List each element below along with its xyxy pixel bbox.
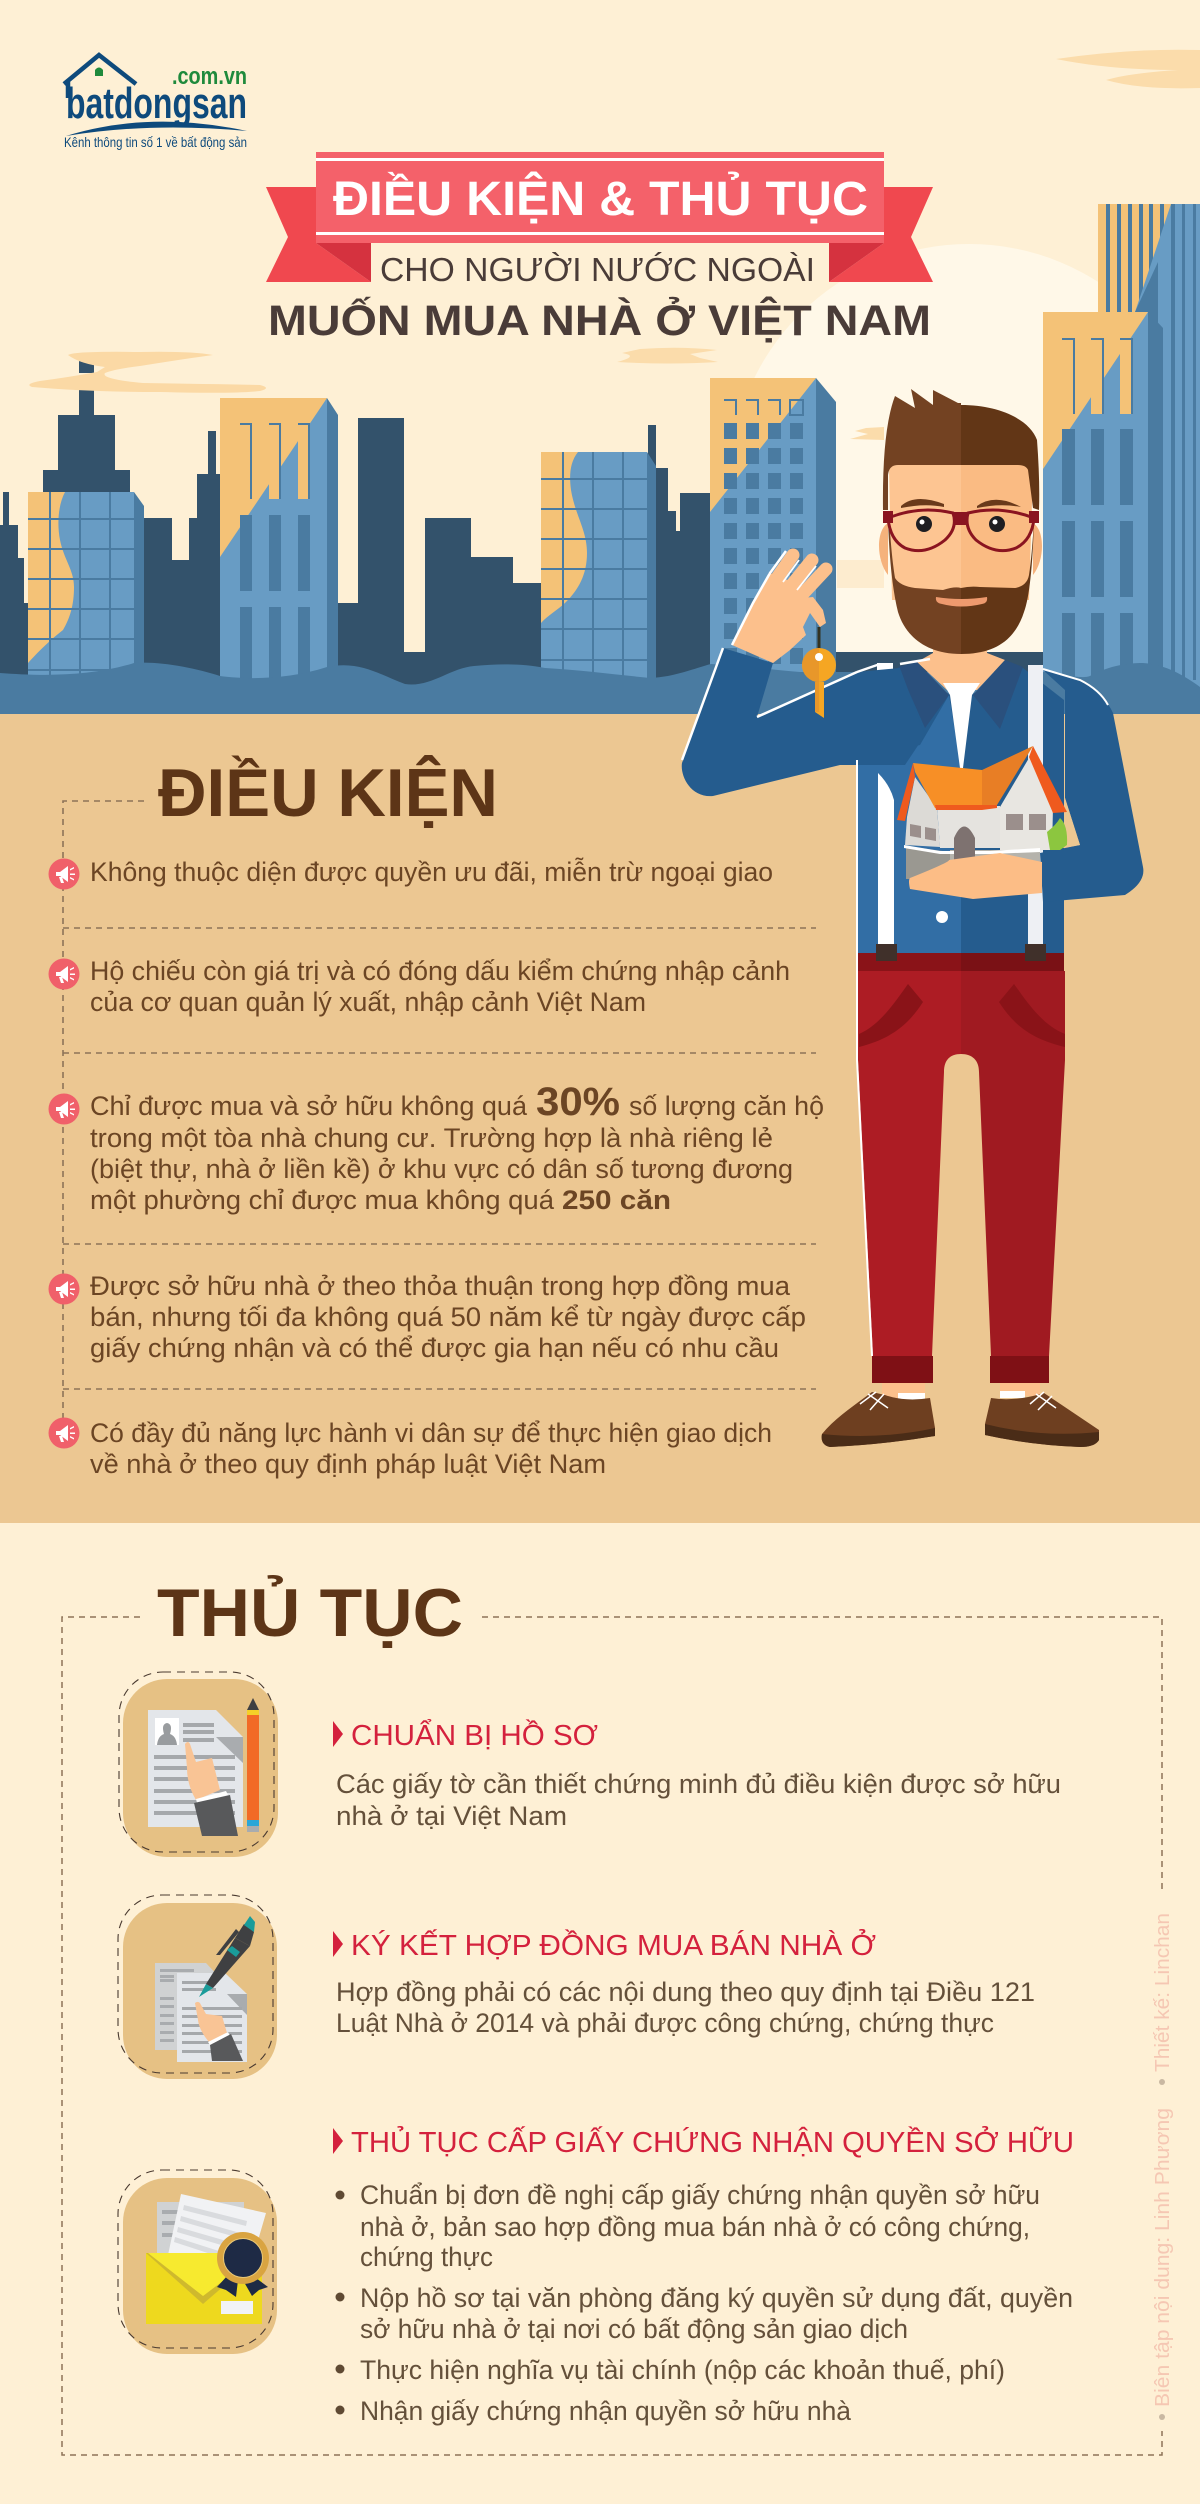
condition 4 text: giấy chứng nhận và có thể được gia hạn nếu có nhu cầu xyxy=(90,1333,779,1363)
step 3 bullet list: sở hữu nhà ở tại nơi có bất động sản giao dịch xyxy=(360,2314,908,2344)
raised hand xyxy=(732,551,826,663)
step 2 text: Luật Nhà ở 2014 và phải được công chứng, chứng thực xyxy=(336,2008,994,2038)
cloud: top right xyxy=(1056,50,1200,88)
step 2 text: Hợp đồng phải có các nội dung theo quy định tại Điều 121 xyxy=(336,1977,1035,2007)
condition 2 text: Hộ chiếu còn giá trị và có đóng dấu kiểm chứng nhập cảnh xyxy=(90,956,790,986)
dark skyline xyxy=(0,361,1043,700)
step 1 text: Các giấy tờ cần thiết chứng minh đủ điều kiện được sở hữu xyxy=(336,1769,1061,1799)
logo tagline: Kênh thông tin số 1 về bất động sản xyxy=(64,134,247,150)
socks xyxy=(898,1391,1025,1400)
step 3 heading: THỦ TỤC CẤP GIẤY CHỨNG NHẬN QUYỀN SỞ HỮU xyxy=(351,2125,1074,2159)
step 3 bullet list: Thực hiện nghĩa vụ tài chính (nộp các khoản thuế, phí) xyxy=(360,2355,1005,2385)
condition 5 text xyxy=(90,1418,772,1479)
belt xyxy=(858,953,961,971)
collar xyxy=(898,660,1023,729)
icon: megaphone 2 xyxy=(48,958,80,990)
building 2 xyxy=(220,398,338,680)
arrow marker 3 xyxy=(333,2128,343,2154)
condition 2 xyxy=(48,956,790,1017)
step 1 text: nhà ở tại Việt Nam xyxy=(336,1801,567,1831)
dashed frame xyxy=(62,1617,1162,2455)
building 4 xyxy=(710,378,836,680)
icon: envelope with seal xyxy=(118,2170,277,2354)
cloud: centre xyxy=(617,348,718,364)
building 3 xyxy=(541,452,656,680)
arrow marker 1 xyxy=(333,1721,343,1747)
jacket torso xyxy=(858,668,1064,953)
title line 1: ĐIỀU KIỆN & THỦ TỤC xyxy=(333,171,868,226)
separators xyxy=(63,928,816,1389)
condition 3 text: 30% xyxy=(536,1080,620,1124)
step 2 text xyxy=(336,1977,1035,2038)
raised arm xyxy=(682,648,925,796)
icon: megaphone 5 xyxy=(48,1418,80,1448)
step 3 bullet list: chứng thực xyxy=(360,2242,493,2272)
section band: điều kiện background xyxy=(0,714,1200,1523)
condition 4 text: Được sở hữu nhà ở theo thỏa thuận trong hợp đồng mua xyxy=(90,1271,791,1301)
eyes xyxy=(916,516,932,532)
condition 3 text: 250 căn xyxy=(562,1185,671,1215)
ground hills xyxy=(0,663,1200,714)
section: điều kiện xyxy=(48,754,824,1479)
ribbon body xyxy=(316,152,884,243)
tan gap beside arm xyxy=(1063,798,1080,848)
face xyxy=(889,465,961,600)
eyebrows xyxy=(901,499,1021,508)
cloud: left smoke over tower xyxy=(29,352,266,393)
condition 2 text xyxy=(90,956,790,1017)
ears xyxy=(879,523,1042,575)
mouth xyxy=(936,597,987,606)
glasses xyxy=(888,510,1034,551)
icon: megaphone 4 xyxy=(48,1274,80,1304)
cloud: pale near hand xyxy=(837,560,884,588)
condition 3 text: (biệt thự, nhà ở liền kề) ở khu vực có dân số tương đương xyxy=(90,1154,793,1184)
step 3 xyxy=(118,2125,1074,2426)
condition 4 text xyxy=(90,1271,806,1363)
step 2 heading: KÝ KẾT HỢP ĐỒNG MUA BÁN NHÀ Ở xyxy=(351,1928,876,1962)
left shoe xyxy=(822,1392,935,1447)
logo domain: .com.vn xyxy=(172,63,247,90)
key xyxy=(802,627,836,718)
suspender clips xyxy=(876,944,1046,961)
condition 5 xyxy=(48,1418,772,1479)
condition 3 text: Chỉ được mua và sở hữu không quá xyxy=(90,1091,528,1121)
condition 3 xyxy=(48,1080,824,1215)
condition 2 text: của cơ quan quản lý xuất, nhập cảnh Việt Nam xyxy=(90,987,646,1017)
title ribbon xyxy=(266,152,933,345)
trousers xyxy=(858,971,961,1356)
step 1 text xyxy=(336,1769,1061,1831)
trouser cuffs xyxy=(872,1356,1049,1383)
ankles xyxy=(882,1383,1040,1398)
neck xyxy=(917,640,1005,690)
step 3 bullet list: Nộp hồ sơ tại văn phòng đăng ký quyền sử dụng đất, quyền xyxy=(360,2283,1073,2313)
condition 3 text: một phường chỉ được mua không quá xyxy=(90,1185,555,1215)
logo swoosh xyxy=(66,122,247,136)
condition 4 text: bán, nhưng tối đa không quá 50 năm kể từ ngày được cấp xyxy=(90,1302,806,1332)
arrow marker 2 xyxy=(333,1931,343,1957)
title line 2: CHO NGƯỜI NƯỚC NGOÀI xyxy=(380,251,815,288)
shirt xyxy=(943,683,980,768)
hair xyxy=(883,389,961,510)
logo window xyxy=(95,68,103,76)
step 3 bullet list: nhà ở, bản sao hợp đồng mua bán nhà ở có công chứng, xyxy=(360,2212,1030,2242)
jacket button xyxy=(936,911,948,923)
plant xyxy=(1047,818,1067,850)
house roof xyxy=(913,763,982,808)
ribbon folds xyxy=(316,243,884,282)
step 1 xyxy=(119,1672,1061,1857)
condition 3 text: số lượng căn hộ xyxy=(629,1091,824,1121)
lower hand xyxy=(909,853,1042,899)
condition 3 text: trong một tòa nhà chung cư. Trường hợp là nhà riêng lẻ xyxy=(90,1123,773,1153)
icon: contract with pen xyxy=(118,1895,277,2079)
icon: megaphone 3 xyxy=(48,1094,80,1124)
credits: Thiết kế: Linchan xyxy=(1152,1913,1174,2072)
condition 1 xyxy=(48,856,773,890)
section: thủ tục xyxy=(62,1574,1174,2455)
pockets xyxy=(859,984,1065,1047)
condition 5 text: về nhà ở theo quy định pháp luật Việt Nam xyxy=(90,1449,606,1479)
heading: THỦ TỤC xyxy=(157,1574,463,1651)
step 2 xyxy=(118,1895,1035,2079)
logo wordmark: batdongsan xyxy=(66,79,247,128)
man holding key and house xyxy=(682,389,1143,1447)
right shoe xyxy=(985,1393,1099,1447)
house door xyxy=(954,826,975,862)
cityscape xyxy=(0,50,1200,714)
title line 3: MUỐN MUA NHÀ Ở VIỆT NAM xyxy=(268,296,931,345)
credits: Biên tập nội dung: Linh Phương xyxy=(1152,2108,1174,2407)
building 6 xyxy=(1098,204,1200,700)
logo xyxy=(64,55,247,150)
cloud: near head xyxy=(850,427,884,440)
right arm xyxy=(1040,670,1143,902)
dashed timeline xyxy=(63,801,144,1430)
condition 5 text: Có đầy đủ năng lực hành vi dân sự để thực hiện giao dịch xyxy=(90,1418,772,1448)
step 1 heading: CHUẨN BỊ HỒ SƠ xyxy=(351,1718,598,1752)
step 3 bullet list xyxy=(336,2180,1073,2426)
condition 4 xyxy=(48,1271,806,1363)
step 3 bullet list: Chuẩn bị đơn đề nghị cấp giấy chứng nhận quyền sở hữu xyxy=(360,2180,1040,2210)
suspenders xyxy=(878,773,894,945)
ribbon tails xyxy=(266,187,933,282)
house windows xyxy=(910,814,1046,841)
condition 3 text xyxy=(90,1080,824,1215)
condition 1 text: Không thuộc diện được quyền ưu đãi, miễn trừ ngoại giao xyxy=(90,856,773,887)
building 1 xyxy=(28,492,144,680)
house xyxy=(897,746,1067,880)
heading: ĐIỀU KIỆN xyxy=(158,754,498,831)
icon: resume with hand and pencil xyxy=(119,1672,278,1857)
building 5 xyxy=(1043,312,1163,690)
logo house xyxy=(64,55,136,98)
step 3 bullet list: Nhận giấy chứng nhận quyền sở hữu nhà xyxy=(360,2396,852,2426)
beard xyxy=(888,520,961,654)
credits xyxy=(1152,1913,1174,2420)
icon: megaphone 1 xyxy=(48,858,80,890)
